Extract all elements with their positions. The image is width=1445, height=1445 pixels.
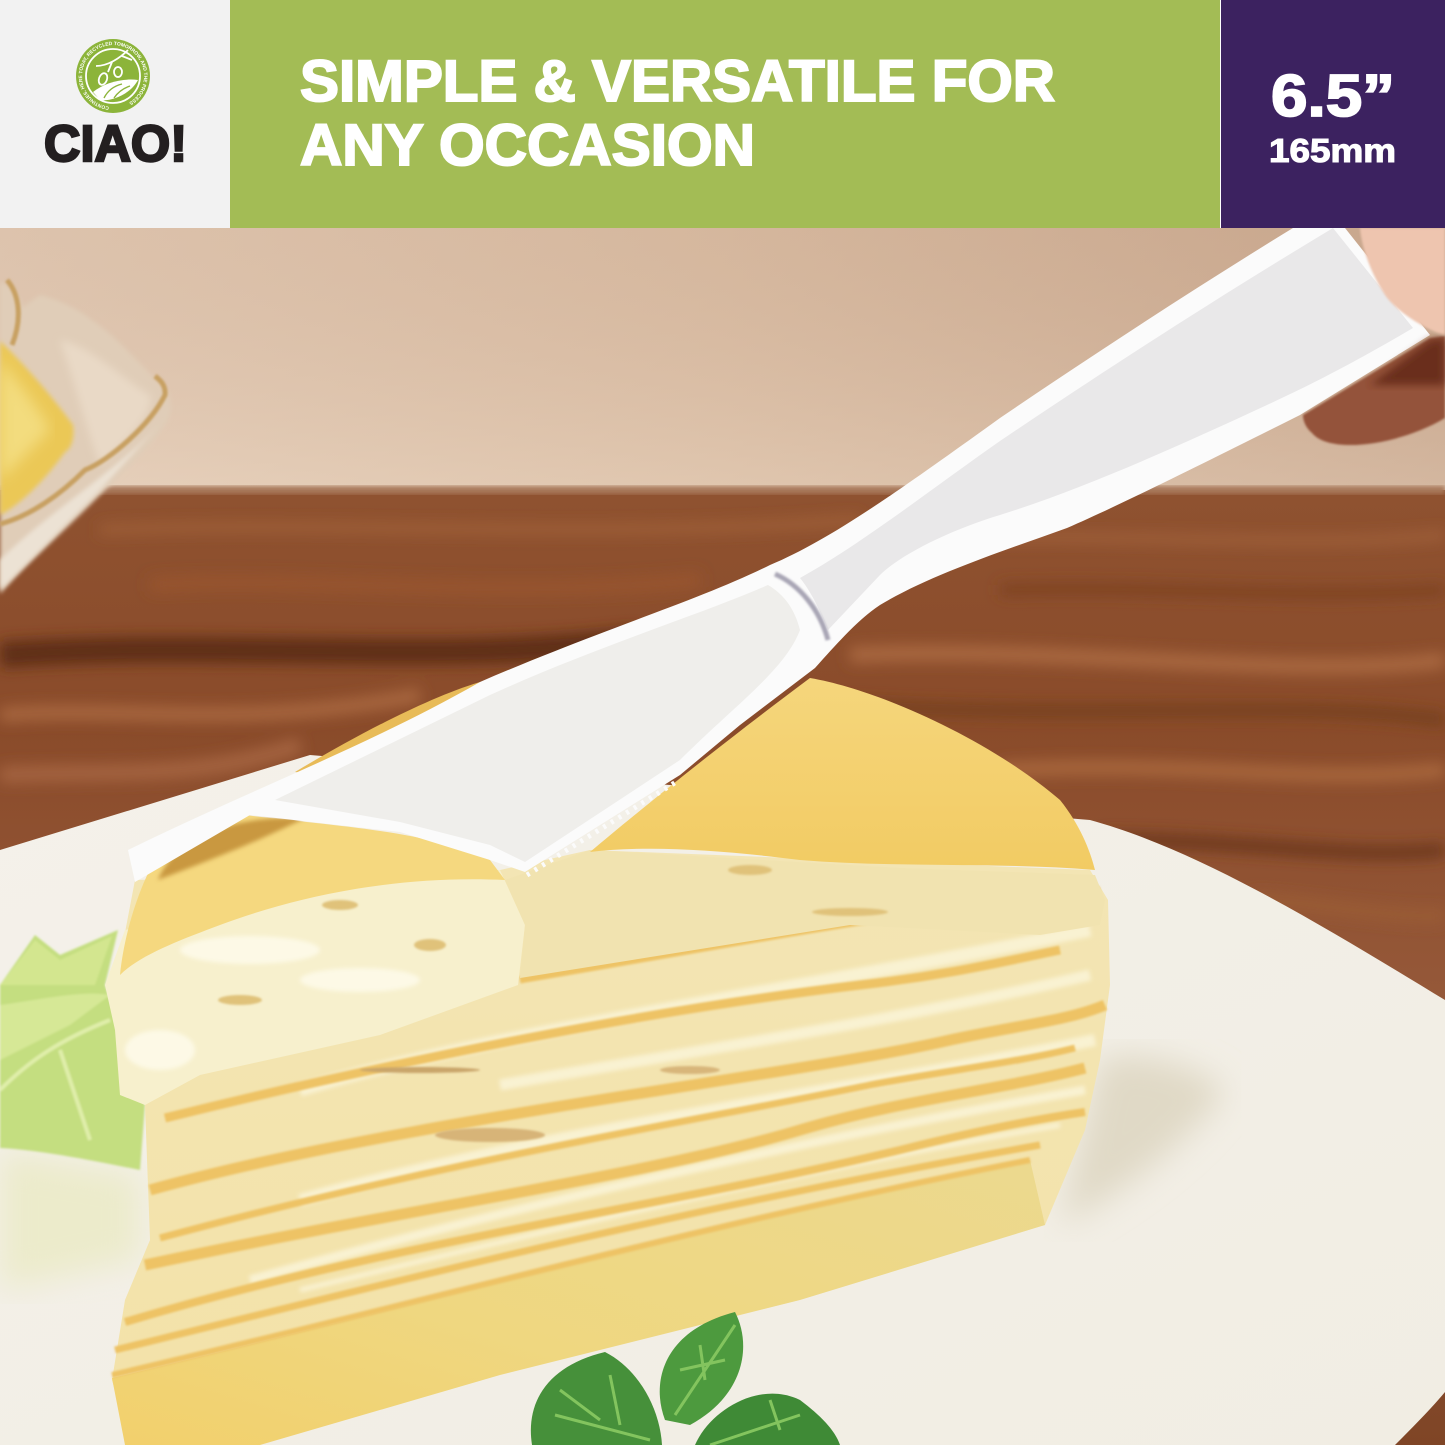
photo: glass dish with cake in background <box>0 280 171 594</box>
cake sponge base <box>112 1160 1045 1445</box>
photo: white plate <box>0 755 1445 1445</box>
knife blade face <box>275 585 800 862</box>
cake side body <box>112 850 1110 1445</box>
knife handle face <box>800 228 1413 630</box>
knife bolster crease <box>775 574 828 640</box>
knife serrated edge <box>527 782 676 875</box>
title <box>300 49 1055 178</box>
icon: round recycling badge: CONTINUES. HERE TODAY, RECYCLED TOMORROW, AND THE PROCESS <box>78 42 148 110</box>
cake yellow layers <box>112 890 1105 1375</box>
header: logo panel <box>0 0 230 228</box>
header: purple size panel <box>1221 0 1445 228</box>
photo: hand holding knife <box>1303 228 1445 445</box>
cake top crust <box>590 678 1095 870</box>
size in inches: 6.5” <box>1271 63 1395 129</box>
logo wordmark: CIAO! <box>44 115 187 172</box>
title: SIMPLE & VERSATILE FOR <box>300 49 1055 114</box>
photo: white plastic knife <box>128 228 1430 882</box>
cake cream upper slab <box>505 850 1105 978</box>
photo: layered crepe cake <box>105 678 1110 1445</box>
title: ANY OCCASION <box>300 113 755 178</box>
cake cream front chunk <box>105 870 525 1105</box>
photo: lettuce leaf <box>0 930 145 1170</box>
header: green title banner <box>230 0 1220 228</box>
knife outline rim <box>128 228 1430 882</box>
photo: mint leaves <box>531 1312 840 1445</box>
size in millimetres: 165mm <box>1269 132 1396 169</box>
cake crumb texture <box>218 865 888 1142</box>
cake light cream ridges <box>250 930 1095 1290</box>
